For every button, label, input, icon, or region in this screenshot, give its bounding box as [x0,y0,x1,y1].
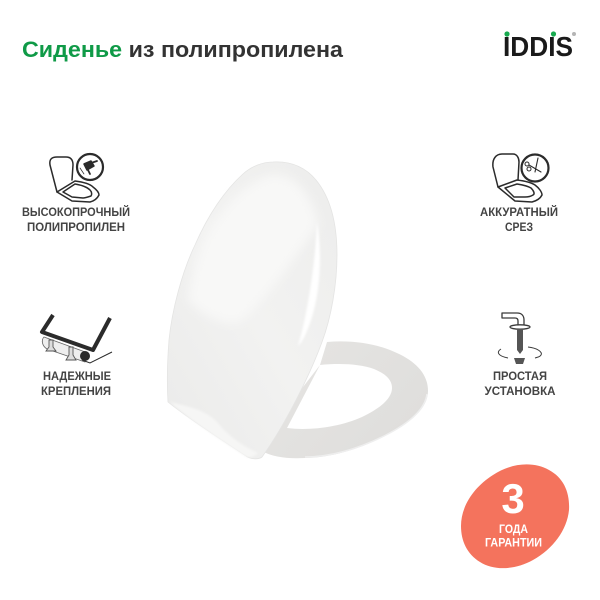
label: high-strength polypropylene [22,204,130,234]
icon: seat with hammer [50,154,103,202]
product: toilet seat ring [262,341,428,458]
logo: iDDiS: IDDIS [503,31,573,62]
label: reliable fasteners: КРЕПЛЕНИЯ [41,384,111,398]
icon: seat with scissors [493,154,548,202]
warranty badge [461,464,569,568]
label: neat cut [480,204,558,234]
label: neat cut: АККУРАТНЫЙ [480,204,558,219]
warranty badge: 3 [501,475,525,522]
lid highlight [188,175,318,323]
label: easy installation: ПРОСТАЯ [493,369,547,383]
label: high-strength polypropylene: ВЫСОКОПРОЧНЫЙ [22,204,130,219]
label: easy installation [484,369,556,398]
label: reliable fasteners: НАДЕЖНЫЕ [43,369,111,383]
label: easy installation: УСТАНОВКА [484,384,556,398]
label: high-strength polypropylene: ПОЛИПРОПИЛЕН [27,220,125,234]
label: neat cut: СРЕЗ [505,220,533,234]
lid right edge highlight [298,222,320,346]
product: toilet seat lid [167,162,337,459]
lid front corner [170,402,258,457]
icon: bolt and nut [498,313,541,364]
label: reliable fasteners [41,369,111,398]
warranty badge: ГАРАНТИИ [485,538,542,550]
title: Сиденье из полипропилена [22,37,344,62]
icon: reliable hinges [42,315,112,363]
warranty badge: ГОДА [499,524,528,536]
